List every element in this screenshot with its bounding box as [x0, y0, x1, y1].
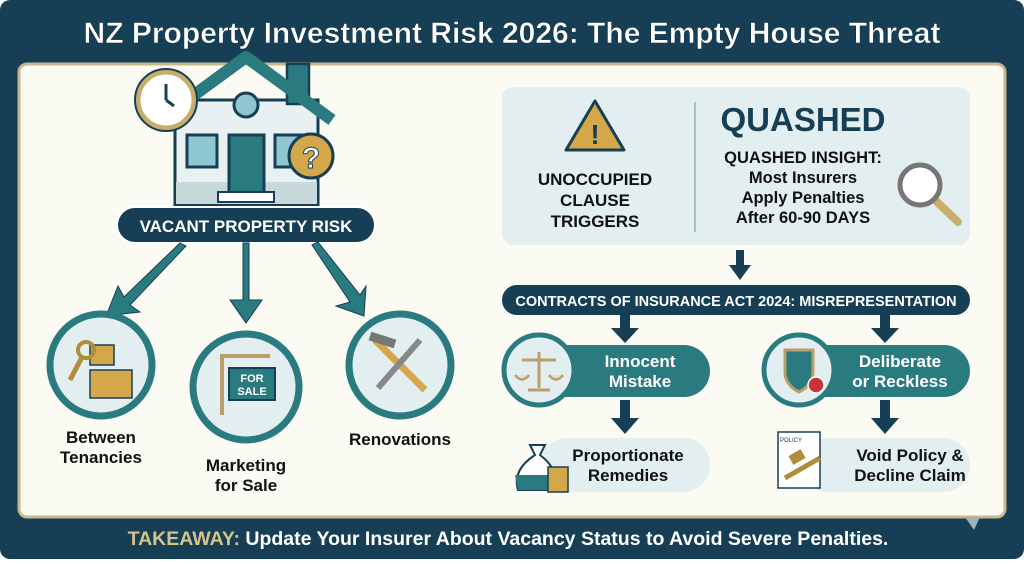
footer takeaway: TAKEAWAY: Update Your Insurer About Vacancy Status to Avoid Severe Penalties. [128, 528, 888, 550]
pill: deliberate or reckless: or Reckless [852, 372, 948, 391]
pill: contracts of insurance act: CONTRACTS OF INSURANCE ACT 2024: MISREPRESENTATION [515, 294, 957, 310]
pill: deliberate or reckless [764, 335, 970, 405]
pill: proportionate remedies: Proportionate [572, 446, 684, 465]
main panel [19, 64, 1005, 517]
arrows: to outcomes [611, 315, 899, 434]
pill: void policy: POLICY [780, 438, 802, 444]
title: NZ Property Investment Risk 2026: The Empty House Threat [84, 17, 940, 50]
icon: question [289, 134, 333, 178]
text: quashed insight: After 60-90 DAYS [736, 209, 870, 227]
pill: contracts of insurance act [502, 285, 970, 315]
circle: renovations [349, 314, 451, 416]
house illustration [135, 57, 333, 205]
label: marketing for sale: for Sale [215, 476, 277, 495]
text: quashed insight: Most Insurers [749, 169, 857, 187]
circle: marketing for sale: FOR [240, 373, 264, 385]
circle: marketing for sale [193, 334, 299, 440]
pill: deliberate or reckless: Deliberate [859, 352, 941, 371]
text: unoccupied clause triggers: UNOCCUPIED [538, 170, 652, 189]
pill: proportionate remedies [515, 438, 710, 492]
pill: vacant property risk: VACANT PROPERTY RISK [140, 217, 353, 236]
text: unoccupied clause triggers: CLAUSE [560, 191, 630, 210]
pill: innocent mistake: Mistake [609, 372, 671, 391]
label: marketing for sale: Marketing [206, 456, 286, 475]
pill: proportionate remedies: Remedies [588, 466, 668, 485]
text: quashed insight: Apply Penalties [742, 189, 864, 207]
text: unoccupied clause triggers: TRIGGERS [551, 212, 639, 231]
pill: void policy [778, 432, 970, 492]
icon: clock [138, 72, 194, 128]
panel: unoccupied clause / quashed insight [502, 87, 970, 245]
icon: warning [566, 101, 624, 150]
label: between tenancies: Between [66, 428, 136, 447]
decorative notch [965, 517, 980, 530]
pill: innocent mistake: Innocent [605, 352, 675, 371]
circle: between tenancies [50, 314, 152, 416]
arrow: down to act [729, 250, 751, 280]
label: between tenancies: Tenancies [60, 448, 142, 467]
icon: magnifier [900, 165, 958, 222]
text: quashed insight: QUASHED INSIGHT: [724, 149, 882, 167]
pill: void policy: Void Policy & [856, 446, 964, 465]
icon: warning: ! [590, 119, 600, 150]
house illustration: ? [302, 142, 320, 175]
heading: quashed: QUASHED [720, 101, 886, 138]
pill: vacant property risk [117, 207, 375, 243]
pill: innocent mistake [504, 335, 710, 405]
pill: void policy: Decline Claim [854, 466, 966, 485]
circle: marketing for sale: SALE [237, 386, 267, 398]
label: renovations: Renovations [349, 430, 451, 449]
arrows: three branches [106, 242, 366, 323]
